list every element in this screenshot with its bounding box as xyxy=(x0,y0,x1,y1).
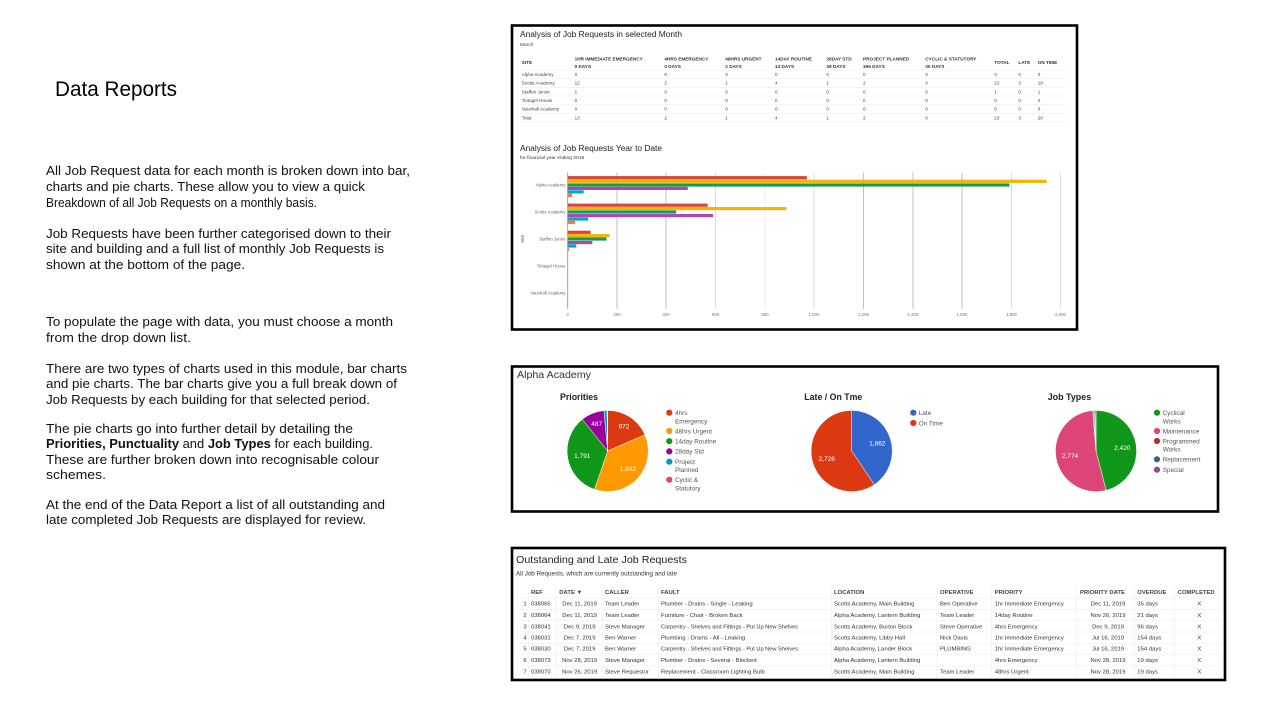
pie chart: Priorities: 972 xyxy=(619,424,630,430)
axis labels: values: 1,200 xyxy=(858,312,870,317)
table: job requests by site: 0 xyxy=(775,98,778,103)
table: job requests by site: 2 DAYS xyxy=(725,64,742,69)
table: job requests by site: 0 xyxy=(575,98,578,103)
text block: how to populate: At the end of the Data Report a list of all outstanding and xyxy=(46,497,385,512)
table rows: Dec 11, 2019 xyxy=(1091,601,1125,607)
table: job requests by site: 0 xyxy=(863,98,866,103)
table: job requests by site: 0 xyxy=(925,72,928,77)
table: job requests by site: 0 xyxy=(575,72,578,77)
text block: how to populate: Priorities, Punctuality and Job Types for each building. xyxy=(46,436,373,451)
table: job requests by site: 365 DAYS xyxy=(863,64,885,69)
table: job requests by site: 0 xyxy=(863,107,866,112)
legend: Priorities: 28day Std xyxy=(675,449,704,456)
bars: Staffon Junior xyxy=(568,231,610,251)
text block: intro: Job Requests have been further categorised down to their xyxy=(46,226,392,241)
legend: Priorities: 4hrs xyxy=(675,410,687,417)
table rows: Plumber - Drains - Single - Leaking xyxy=(661,601,753,607)
pie chart: Late / On Time: 1,862 xyxy=(869,441,886,448)
text block: how to populate: These are further broken down into recognisable colour xyxy=(46,452,380,467)
legend: Job Types: Maintenance xyxy=(1163,428,1200,435)
table: job requests by site: 1 xyxy=(725,116,728,121)
table rows: Carpentry - Shelves and Fittings - Put Up New Shelves xyxy=(661,624,798,630)
table rows: X xyxy=(1197,669,1201,675)
table rows: 1hr Immediate Emergency xyxy=(995,601,1064,607)
table rows: Nick Davis xyxy=(940,636,968,642)
table rows: 154 days xyxy=(1137,647,1161,653)
table: job requests by site: 0 xyxy=(826,89,829,94)
table rows: 4hrs Emergency xyxy=(995,658,1038,664)
table rows: Alpha Academy, Lantern Building xyxy=(834,658,920,664)
bar chart: year to date by site xyxy=(520,172,1067,317)
table: outstanding job requests xyxy=(516,586,1222,678)
table header: OVERDUE xyxy=(1137,590,1167,596)
axis labels: sites: Scotts Academy xyxy=(535,210,566,214)
panel: Outstanding and Late Job Requests xyxy=(512,548,1225,680)
table: job requests by site: 0 xyxy=(925,81,928,86)
table header: PRIORITY xyxy=(995,590,1023,596)
table rows: 2 xyxy=(523,613,527,619)
table: job requests by site: 0 xyxy=(863,72,866,77)
table: job requests by site: 2 xyxy=(664,81,667,86)
bars: Alpha Academy xyxy=(568,176,1047,197)
pie chart: Job Types: 2,774 xyxy=(1062,453,1079,460)
table rows: Nov 28, 2019 xyxy=(562,658,597,664)
table rows: Ben Warner xyxy=(605,636,636,642)
table rows: Carpentry - Shelves and Fittings - Put Up New Shelves xyxy=(661,647,798,653)
table: job requests by site: TOTAL xyxy=(994,60,1010,65)
table rows: X xyxy=(1197,636,1201,642)
legend: Priorities: 14day Routine xyxy=(675,438,717,446)
text block: how to populate: from the drop down list. xyxy=(46,330,191,345)
legend: Priorities xyxy=(666,410,717,492)
table rows: 038065 xyxy=(531,601,551,607)
table: job requests by site: 0 xyxy=(1038,72,1041,77)
table rows: Replacement - Classroom Lighting Bulb xyxy=(661,669,766,675)
table: job requests by site: Total xyxy=(522,116,531,121)
text block: intro: shown at the bottom of the page. xyxy=(46,257,245,272)
pie chart: Priorities xyxy=(560,392,717,492)
table: job requests by site: Tintagel House xyxy=(522,98,553,103)
table: job requests by site: Vauxhall Academy xyxy=(522,107,560,112)
axis labels: sites xyxy=(520,182,566,296)
text block: how to populate: To populate the page with data, you must choose a month xyxy=(46,314,393,329)
table rows: Dec 7, 2019 xyxy=(564,636,595,642)
table rows: Nov 26, 2019 xyxy=(562,669,597,675)
subheading: March: March xyxy=(520,42,534,48)
legend: Job Types: Cyclical xyxy=(1163,410,1185,417)
pie chart: Late / On Time xyxy=(804,392,943,492)
table: job requests by site: SITE xyxy=(522,60,532,65)
table rows: Plumbing - Drains - All - Leaking xyxy=(661,636,745,642)
table rows: 4 xyxy=(523,636,527,642)
panel: monthly analysis and year to date xyxy=(512,26,1077,330)
table rows: Steve Manager xyxy=(605,658,645,664)
pie chart: Job Types: 2,420 xyxy=(1114,445,1131,452)
bars: Scotts Academy xyxy=(568,204,786,224)
table rows: Jul 16, 2019 xyxy=(1092,647,1124,653)
table rows: Nov 28, 2019 xyxy=(1090,658,1126,664)
text block: how to populate: Job Requests by each building for that selected period. xyxy=(46,392,370,407)
pie chart: Priorities: 1,791 xyxy=(574,453,591,460)
table rows: Jul 16, 2019 xyxy=(1092,636,1124,642)
legend: Late / On Time: On Time xyxy=(919,420,943,427)
table: job requests by site: 0 xyxy=(1018,107,1021,112)
table: job requests by site: 0 xyxy=(664,89,667,94)
table rows: Team Leader xyxy=(940,669,974,675)
table: job requests by site: 19 xyxy=(1038,81,1043,86)
table rows: Scotts Academy, Main Building xyxy=(834,669,914,675)
table: job requests by site: 0 xyxy=(863,89,866,94)
axis labels: sites: Alpha Academy xyxy=(536,182,566,188)
table rows: Steve Operative xyxy=(940,624,983,630)
legend: Priorities: Cyclic & xyxy=(675,477,699,484)
table: job requests by site: Scotts Academy xyxy=(522,81,555,86)
table: job requests by site: 0 DAYS xyxy=(664,64,681,69)
table: job requests by site: 0 xyxy=(1038,98,1041,103)
table: job requests by site: 0 xyxy=(725,98,728,103)
legend: Job Types: Works xyxy=(1163,418,1181,425)
axis labels: values: 1,000 xyxy=(808,312,820,317)
legend: Late / On Time xyxy=(910,410,943,427)
text block: how to populate: late completed Job Requests are displayed for review. xyxy=(46,512,366,527)
axis labels: values: 1,600 xyxy=(956,312,968,317)
pie chart: Priorities: Priorities xyxy=(560,392,598,402)
table rows: Alpha Academy, Lantern Building xyxy=(834,613,920,619)
heading: Analysis of Job Requests Year to Date: Analysis of Job Requests Year to Date xyxy=(520,143,662,153)
table rows: Furniture - Chair - Broken Back xyxy=(661,613,743,619)
axis labels: values: 200 xyxy=(613,312,621,317)
table: job requests by site: 48HRS URGENT xyxy=(725,56,762,62)
text block: how to populate xyxy=(46,314,407,527)
table rows: 21 days xyxy=(1137,613,1158,619)
pie chart: Priorities: 1,942 xyxy=(620,466,636,473)
table header: PRIORITY DATE xyxy=(1080,590,1125,596)
heading: Data Reports: Data Reports xyxy=(55,77,177,101)
legend: Job Types: Programmed xyxy=(1163,438,1200,445)
table rows: Dec 9, 2019 xyxy=(1092,624,1124,630)
table: job requests by site: 0 xyxy=(775,107,778,112)
axis labels: values: 400 xyxy=(662,312,670,317)
table: job requests by site: 1 xyxy=(725,81,728,86)
axis labels: sites: Staffon Junior xyxy=(539,236,566,242)
table rows: 038064 xyxy=(531,613,551,619)
table rows: 19 days xyxy=(1137,669,1158,675)
legend: Job Types xyxy=(1154,410,1201,474)
table header: LOCATION xyxy=(834,590,864,596)
table: job requests by site: 0 xyxy=(826,107,829,112)
table: job requests by site: 4 xyxy=(775,116,778,121)
table header xyxy=(531,590,1215,596)
table rows: 1hr Immediate Emergency xyxy=(995,647,1064,653)
table: job requests by site: 28DAY STD xyxy=(826,56,852,62)
table: job requests by site: 13 xyxy=(575,116,580,121)
table: job requests by site: 0 xyxy=(775,72,778,77)
table rows: X xyxy=(1197,601,1201,607)
axis labels: values: 2,000 xyxy=(1055,312,1067,317)
table rows: Team Leader xyxy=(605,613,639,619)
table: job requests by site: 0 xyxy=(826,98,829,103)
table header: FAULT xyxy=(661,590,680,596)
table rows: 4hrs Emergency xyxy=(995,624,1038,630)
table rows: 154 days xyxy=(1137,636,1161,642)
table rows: 14day Routine xyxy=(995,613,1033,619)
table rows: 038041 xyxy=(531,624,551,630)
table: job requests by site: PROJECT PLANNED xyxy=(863,56,910,62)
table rows: X xyxy=(1197,658,1201,664)
table: job requests by site: 2 xyxy=(664,116,667,121)
table: job requests by site: 14DAY ROUTINE xyxy=(775,56,812,62)
text block: how to populate: There are two types of charts used in this module, bar charts xyxy=(46,361,407,376)
table: job requests by site: 0 xyxy=(725,72,728,77)
table: job requests by site: 1 xyxy=(826,116,829,121)
table rows: X xyxy=(1197,647,1201,653)
axis labels: sites: Site xyxy=(520,235,526,243)
table: job requests by site: 1HR IMMEDIATE EMERGENCY xyxy=(575,56,644,62)
table rows: 19 days xyxy=(1137,658,1158,664)
table rows: 48hrs Urgent xyxy=(995,669,1029,675)
table: job requests by site: 0 xyxy=(575,107,578,112)
table: job requests by site: 14 DAYS xyxy=(775,64,794,69)
table: job requests by site xyxy=(520,56,1066,122)
table: job requests by site: LATE xyxy=(1018,60,1030,65)
table rows: Ben Warner xyxy=(605,647,636,653)
table rows: 35 days xyxy=(1137,601,1158,607)
table rows xyxy=(523,601,1201,675)
text block: intro: site and building and a full list of monthly Job Requests is xyxy=(46,241,384,256)
heading: Alpha Academy: Alpha Academy xyxy=(517,369,592,381)
table rows: Nov 28, 2019 xyxy=(1090,669,1126,675)
table rows: Scotts Academy, Burton Block xyxy=(834,624,913,630)
table: job requests by site: 28 DAYS xyxy=(826,64,846,69)
table rows: Dec 7, 2019 xyxy=(564,647,595,653)
table: job requests by site: 0 xyxy=(826,72,829,77)
table: job requests by site: 0 xyxy=(1018,98,1021,103)
text block: intro: charts and pie charts. These allow you to view a quick xyxy=(46,179,365,194)
text block: intro: All Job Request data for each month is broken down into bar, xyxy=(46,163,410,178)
table: job requests by site: Staffon Junior xyxy=(522,89,550,94)
axis labels: values: 800 xyxy=(761,312,769,317)
legend: Priorities: Statutory xyxy=(675,485,701,492)
table rows: Scotts Academy, Libby Hall xyxy=(834,636,905,642)
table rows: 1 xyxy=(523,601,527,607)
text block: how to populate: The pie charts go into further detail by detailing the xyxy=(46,421,353,436)
table: job requests by site: 3 xyxy=(1018,81,1021,86)
table: job requests by site: 3 xyxy=(1018,116,1021,121)
table: job requests by site: 1 xyxy=(826,81,829,86)
subheading: for financial year ending 2016: for financial year ending 2016 xyxy=(520,155,584,161)
table rows: 038070 xyxy=(531,669,551,675)
legend: Job Types: Replacement xyxy=(1163,457,1201,464)
table rows: Plumber - Drains - Several - Blocked xyxy=(661,658,757,664)
table: job requests by site: 2 xyxy=(863,116,866,121)
table: job requests by site: 0 DAYS xyxy=(575,64,591,69)
heading: Analysis of Job Requests in selected Month: Analysis of Job Requests in selected Month xyxy=(520,29,682,39)
table rows: 6 xyxy=(523,658,527,664)
table rows: 038031 xyxy=(531,636,551,642)
table rows: Steve Manager xyxy=(605,624,645,630)
table: job requests by site: 2 xyxy=(863,81,866,86)
table rows: Dec 11, 2019 xyxy=(562,601,597,607)
table rows: Steve Requestor xyxy=(605,669,649,675)
text block: intro: Breakdown of all Job Requests on a monthly basis. xyxy=(46,195,317,210)
table: job requests by site: 0 xyxy=(925,89,928,94)
table rows: 3 xyxy=(523,624,527,630)
legend: Priorities: Emergency xyxy=(675,418,708,425)
table: job requests by site: 0 xyxy=(1018,72,1021,77)
table: job requests by site: 0 xyxy=(664,72,667,77)
table: job requests by site: 0 xyxy=(775,89,778,94)
text block: intro xyxy=(46,163,410,272)
table: job requests by site: 4 xyxy=(775,81,778,86)
table rows: X xyxy=(1197,613,1201,619)
table rows: Nov 26, 2019 xyxy=(1090,613,1126,619)
pie chart: Job Types xyxy=(1048,392,1201,492)
text block: how to populate: and pie charts. The bar charts give you a full break down of xyxy=(46,376,397,391)
axis labels: values: 1,800 xyxy=(1006,312,1018,317)
table rows: 1hr Immediate Emergency xyxy=(995,636,1064,642)
table rows: 038030 xyxy=(531,647,551,653)
table: job requests by site: Alpha Academy xyxy=(522,72,554,77)
table: job requests by site: 0 xyxy=(725,89,728,94)
table: job requests by site: 0 xyxy=(925,116,928,121)
table: job requests by site: 0 xyxy=(1038,107,1041,112)
table: job requests by site: 0 xyxy=(925,98,928,103)
pie chart: Late / On Time: Late / On Tme xyxy=(804,392,862,402)
table header: REF xyxy=(531,590,543,596)
axis labels: values: 600 xyxy=(712,312,720,317)
table: job requests by site: 0 xyxy=(925,107,928,112)
table rows: Dec 11, 2019 xyxy=(562,613,597,619)
table: job requests by site: 0 xyxy=(1018,89,1021,94)
pie chart: Late / On Time: 2,726 xyxy=(819,456,835,463)
table: job requests by site: CYCLIC & STATUTORY xyxy=(925,56,977,62)
table: job requests by site: 0 xyxy=(664,98,667,103)
table: job requests by site: 4HRS EMERGENCY xyxy=(664,56,709,62)
table: job requests by site: 22 xyxy=(994,81,1000,86)
table rows: Scotts Academy, Main Building xyxy=(834,601,914,607)
table: job requests by site: 0 xyxy=(725,107,728,112)
panel: Alpha Academy pie charts xyxy=(512,366,1218,512)
table: job requests by site: 0 xyxy=(994,72,997,77)
legend: Job Types: Special xyxy=(1163,467,1184,474)
table rows: Team Leader xyxy=(940,613,974,619)
table: job requests by site: 1 xyxy=(994,89,997,94)
legend: Late / On Time: Late xyxy=(919,410,932,417)
axis labels: sites: Vauxhall Academy xyxy=(530,290,566,296)
table rows: 96 days xyxy=(1137,624,1158,630)
table rows: PLUMBING xyxy=(940,647,971,653)
text block: how to populate: schemes. xyxy=(46,467,106,482)
axis labels: sites: Tintagel House xyxy=(537,264,566,268)
axis labels: values: 0 xyxy=(566,312,569,317)
heading: Outstanding and Late Job Requests: Outstanding and Late Job Requests xyxy=(516,554,687,566)
table: job requests by site: 23 xyxy=(994,116,1000,121)
table rows: 5 xyxy=(523,647,527,653)
subheading: All Job Requests, which are currently outstanding and late xyxy=(516,572,678,578)
table: job requests by site: 1 xyxy=(575,89,578,94)
table rows: Alpha Academy, Lander Block xyxy=(834,647,912,653)
table: job requests by site: 1 xyxy=(1038,89,1041,94)
table rows: Ben Operative xyxy=(940,601,978,607)
pie chart: Job Types: Job Types xyxy=(1048,392,1091,402)
table rows: 7 xyxy=(523,669,527,675)
legend: Priorities: Planned xyxy=(675,467,699,474)
table: job requests by site: 0 xyxy=(664,107,667,112)
table rows: Dec 9, 2019 xyxy=(564,624,595,630)
table header: CALLER xyxy=(605,590,630,596)
table rows: X xyxy=(1197,624,1201,630)
legend: Priorities: 48hrs Urgent xyxy=(675,428,712,435)
table rows: 038073 xyxy=(531,658,551,664)
table: job requests by site: 20 xyxy=(1038,116,1043,121)
pie chart: Priorities: 487 xyxy=(591,421,603,428)
table: job requests by site: 0 xyxy=(994,107,997,112)
axis labels: values xyxy=(566,312,1067,317)
legend: Job Types: Works xyxy=(1163,446,1181,453)
table header: DATE ▼ xyxy=(559,590,582,596)
table header: COMPLETED xyxy=(1178,590,1215,596)
legend: Priorities: Project xyxy=(675,459,695,466)
table: job requests by site: 30 DAYS xyxy=(925,64,944,69)
table: job requests by site: 0 xyxy=(994,98,997,103)
table: job requests by site: ON TIME xyxy=(1038,60,1057,65)
table header: OPERATIVE xyxy=(940,590,974,596)
table rows: Team Leader xyxy=(605,601,639,607)
axis labels: values: 1,400 xyxy=(908,312,919,317)
table: job requests by site: 12 xyxy=(575,81,580,86)
